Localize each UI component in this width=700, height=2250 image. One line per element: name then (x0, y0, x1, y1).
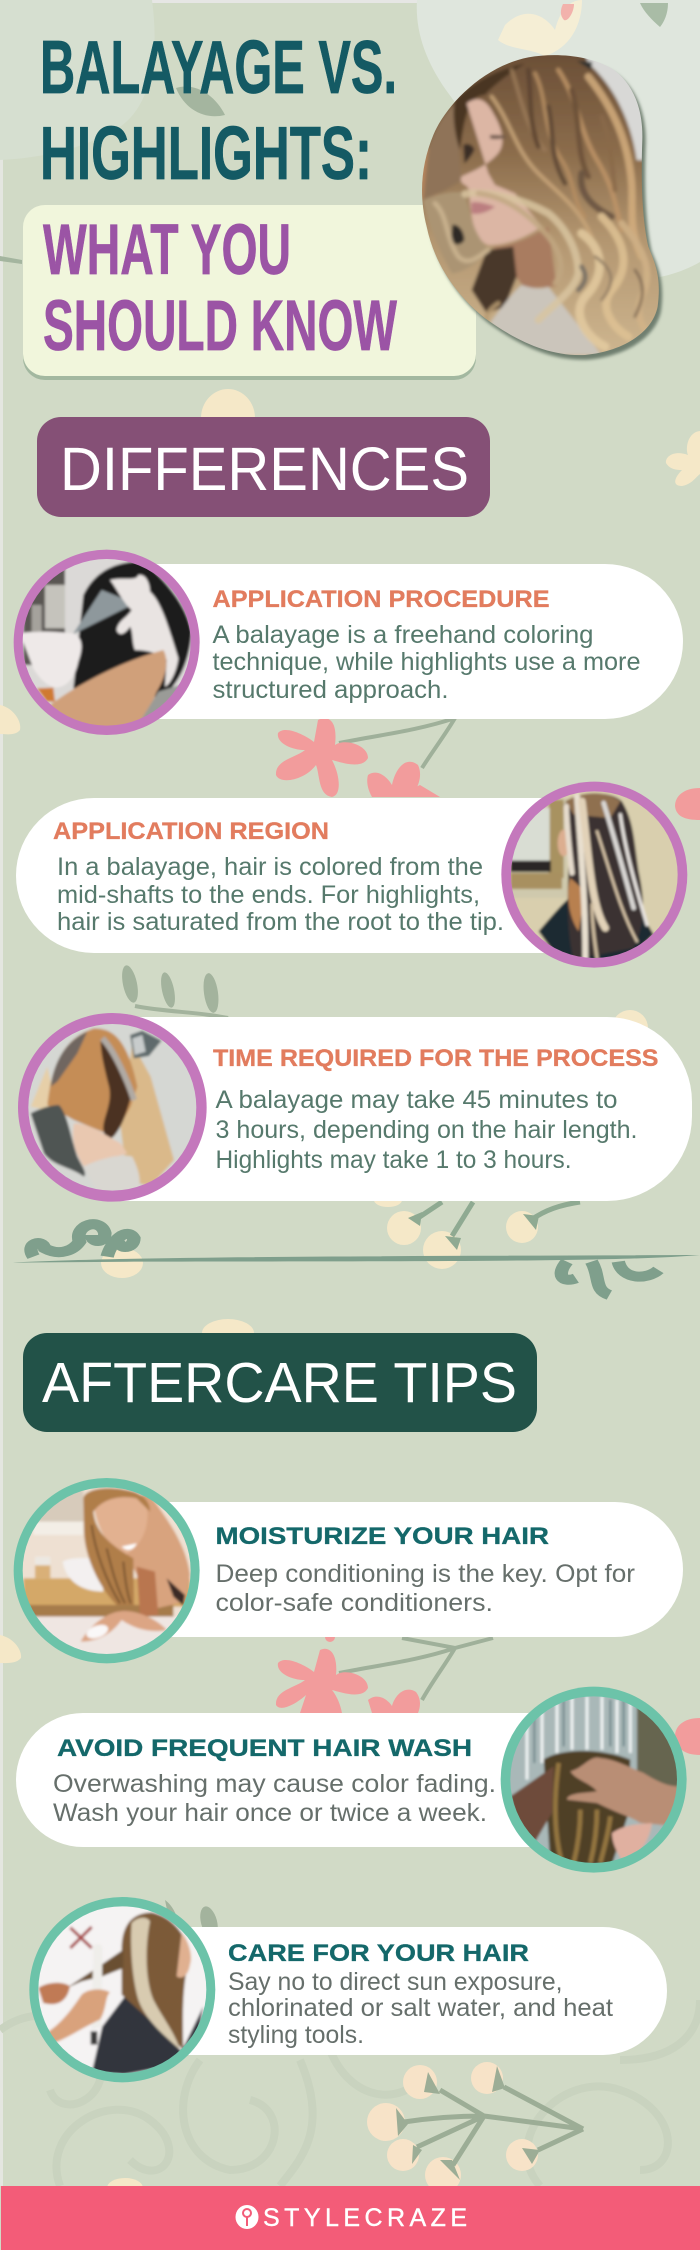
heading: application region: APPLICATION REGION (53, 818, 329, 845)
title: Balayage vs. Highlights (40, 25, 397, 195)
photo: balayage application (10, 545, 205, 740)
heading: avoid hair wash: AVOID FREQUENT HAIR WASH (57, 1735, 472, 1762)
heading: time required: TIME REQUIRED FOR THE PROCESS (213, 1045, 658, 1072)
panel: subtitle What You Should Know: SHOULD KNOW (43, 287, 397, 366)
panel: subtitle What You Should Know: WHAT YOU (43, 211, 291, 290)
title: Balayage vs. Highlights: HIGHLIGHTS: (40, 111, 372, 195)
text: moisturize body (216, 1560, 635, 1617)
card: avoid frequent hair wash (16, 1683, 692, 1878)
card: application procedure (10, 545, 683, 740)
text: avoid hair wash body (53, 1770, 496, 1827)
text: moisturize body: color-safe conditioners. (216, 1589, 493, 1617)
logo wordmark: STYLECRAZE (263, 2204, 467, 2232)
text: care for your hair body: styling tools. (228, 2021, 364, 2049)
heading: aftercare tips (23, 1333, 537, 1432)
text: care for your hair body (228, 1968, 613, 2049)
card: care for your hair (25, 1893, 667, 2088)
text: application region body: hair is saturated from the root to the tip. (57, 908, 504, 936)
heading: application procedure: APPLICATION PROCEDURE (212, 586, 550, 613)
text: application procedure body (212, 621, 640, 704)
title: Balayage vs. Highlights: BALAYAGE VS. (40, 25, 397, 109)
text: care for your hair body: chlorinated or salt water, and heat (228, 1994, 613, 2022)
text: application procedure body: technique, while highlights use a more (212, 648, 640, 676)
photo: washing hair in shower (497, 1683, 692, 1878)
text: time required body: A balayage may take 45 minutes to (216, 1086, 618, 1114)
card: application region (16, 778, 692, 973)
photo: hair coloring at salon (14, 1010, 209, 1205)
card: moisturize your hair (10, 1475, 683, 1670)
text: application procedure body: structured approach. (212, 676, 448, 704)
text: time required body: 3 hours, depending on the hair length. (216, 1116, 638, 1144)
heading: Differences (37, 417, 490, 517)
heading: care for your hair: CARE FOR YOUR HAIR (228, 1940, 529, 1967)
heading: aftercare tips: AFTERCARE TIPS (42, 1351, 517, 1415)
text: application procedure body: A balayage is a freehand coloring (212, 621, 594, 649)
heading: Differences: DIFFERENCES (60, 435, 469, 503)
photo: flat iron styling with cross mark (25, 1893, 220, 2088)
photo: highlighted hair (497, 778, 692, 973)
panel: subtitle What You Should Know (23, 205, 476, 380)
text: moisturize body: Deep conditioning is the key. Opt for (216, 1560, 635, 1588)
footer bar (1, 2186, 700, 2250)
heading: moisturize: MOISTURIZE YOUR HAIR (216, 1523, 549, 1550)
photo: woman with conditioner (10, 1475, 205, 1670)
text: application region body: In a balayage, hair is colored from the (57, 853, 483, 881)
photo: woman with balayage hair (415, 50, 665, 365)
divider with swirls (12, 1224, 700, 1295)
icon: stylecraze logo (236, 2205, 258, 2229)
text: time required body: Highlights may take 1 to 3 hours. (216, 1146, 572, 1174)
text: avoid hair wash body: Wash your hair once or twice a week. (53, 1799, 487, 1827)
text: application region body (57, 853, 504, 936)
text: time required body (216, 1086, 638, 1174)
card: time required (14, 1010, 692, 1205)
text: avoid hair wash body: Overwashing may cause color fading. (53, 1770, 496, 1798)
text: application region body: mid-shafts to the ends. For highlights, (57, 881, 480, 909)
text: care for your hair body: Say no to direct sun exposure, (228, 1968, 562, 1996)
